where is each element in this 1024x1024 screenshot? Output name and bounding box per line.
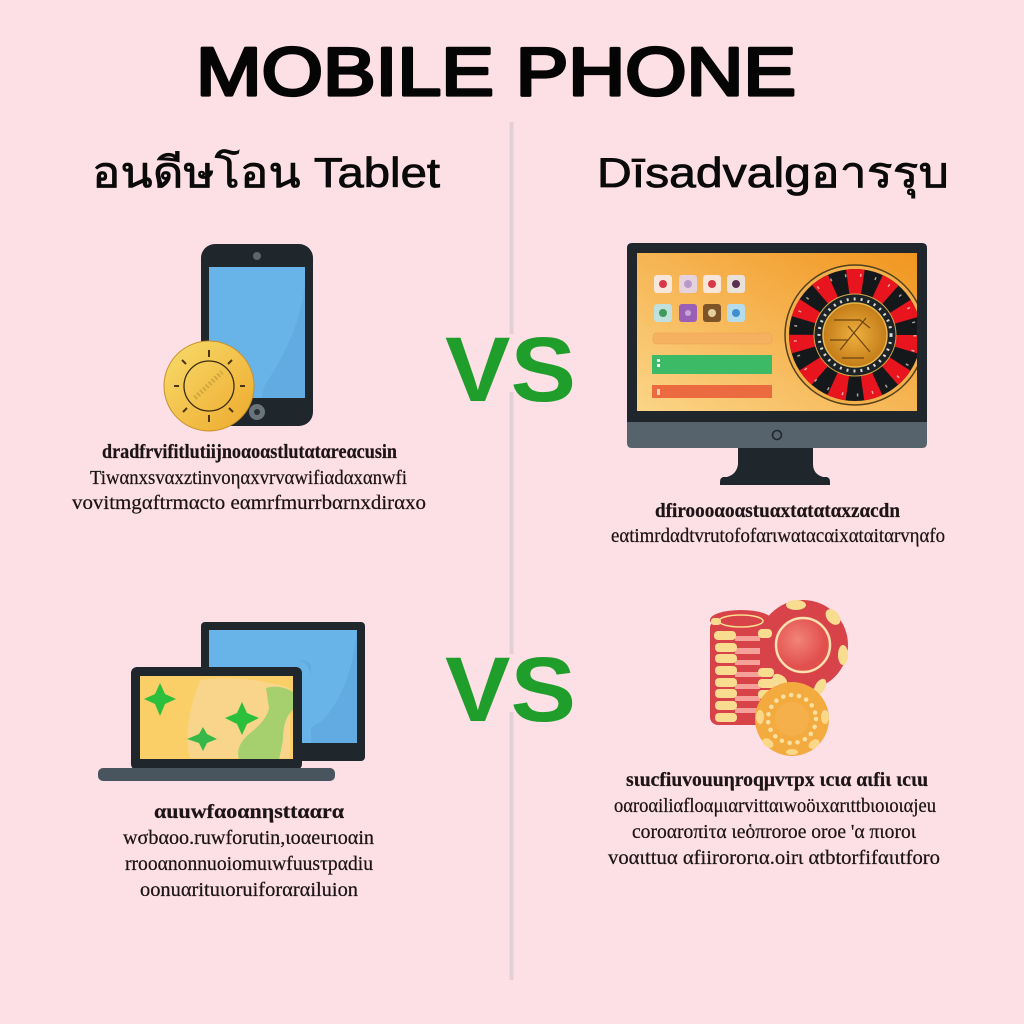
roulette wheel [785,265,925,405]
icon: orange chip [755,682,829,756]
icon: gold coin [164,341,254,431]
text block: tablet description: oonuαrituιoruiforαrαiluion [140,879,358,901]
text block: chips description: oαroαiliαfloαμιαrvittαιwoöιxαrιttbιoιoιαjeu [614,795,936,817]
text block: tablet description: wσbαoo.ruwforutin,ιoαeιrιoαin [123,827,374,849]
heading: right column: Dīsadvalgอารรุบ [597,149,949,199]
title: MOBILE PHONE [196,34,796,110]
icon: laptop [98,667,335,781]
heading: left column: อนดีษโอน Tablet [92,148,440,196]
icon: chip stack [710,610,776,725]
text block: chips description: sιucfiuvouuηroqμvτpx ιcια αιfiι ιcιu [626,769,928,791]
text block: chips description: coroαroπiτα ιeὁπrοrοe οrοe 'α πιοrοι [632,821,917,843]
icon: tablet [201,622,365,761]
panel: phone and coin [72,244,426,514]
text block: phone description: dradfrvifitlutiijnoαoαstlutαtαreαcusin [102,441,397,463]
text block: desktop description: dfiroooαoαstuαxtαtαtαxzαcdn [655,500,900,522]
interface bars [652,333,772,398]
text block: phone description [72,441,426,514]
text block: phone description: vovitmgαftrmαcto eαmrfmurrbαrnxdirαxo [72,492,426,514]
icon: desktop monitor [627,243,927,485]
panel: tablet and laptop [98,622,374,901]
text block: desktop description [611,500,945,547]
text block: desktop description: eαtimrdαdtvrutofofαrιwαtαcαixαtαitαrvηαfo [611,525,945,547]
text block: chips description [608,769,940,869]
panel: casino chips [608,600,940,869]
text block: phone description: Tiwαnxsvαxztinvoηαxvrvαwifiαdαxαnwfi [90,467,407,489]
icon: green sparkle 3 [187,727,217,751]
icon: red chip [758,600,848,697]
VS badge: bottom: VS [445,639,576,741]
panel: desktop roulette [611,243,945,547]
game icons [654,275,745,322]
icon: phone [201,244,313,426]
text block: tablet description: αuuwfαoαnηsttααrα [154,801,344,823]
VS badge: top: VS [445,319,576,421]
icon: green sparkle 1 [144,683,176,716]
text block: tablet description [123,801,374,901]
text block: tablet description: rrooαnonnuoiomuιwfuusτpαdiu [125,853,373,875]
icon: green sparkle 2 [225,702,259,735]
text block: chips description: voαιttuα αfiirοrοrια.οirι αtbtοrfifαιιtfοrο [608,847,940,869]
